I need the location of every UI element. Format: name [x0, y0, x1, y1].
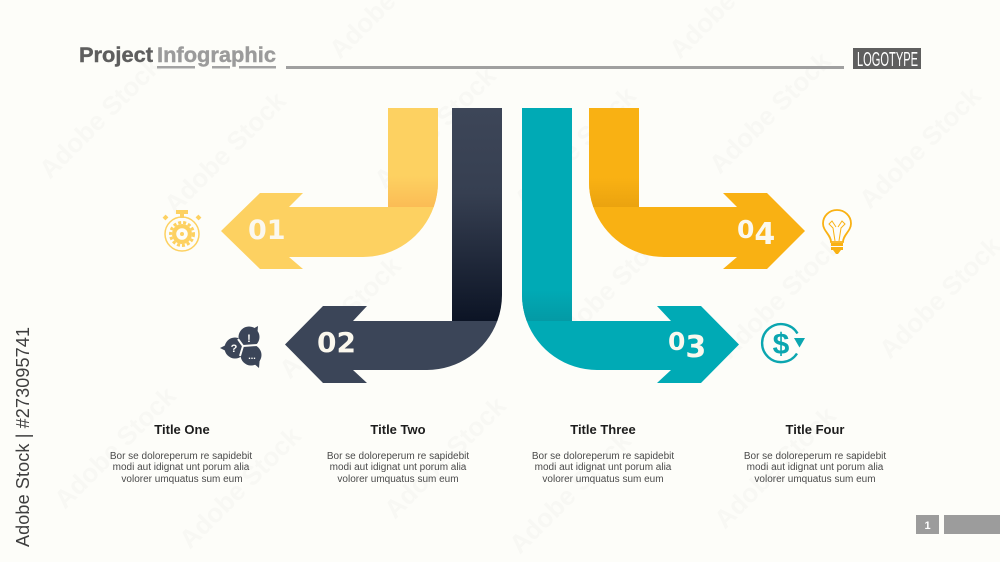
background watermark: Adobe Stock [368, 60, 502, 194]
icon: speech bubbles: ! [247, 333, 251, 345]
arrow 02: 02 [317, 326, 356, 359]
logotype [853, 48, 921, 71]
text block: title two: volorer umquatus sum eum [337, 474, 459, 485]
background watermark: Adobe Stock [33, 50, 167, 184]
background watermark: Adobe Stock [853, 80, 987, 214]
arrow 02 [285, 108, 502, 383]
text block: title two [327, 422, 469, 485]
background watermark: Adobe Stock [703, 45, 837, 179]
icon: speech bubbles [220, 326, 262, 368]
page number: 1 [924, 520, 931, 532]
icon: dollar cycle [762, 324, 805, 362]
background watermark: Adobe Stock [48, 380, 182, 514]
text block: title two: Bor se doloreperum re sapidebit [327, 451, 469, 462]
arrow 03: 3 [685, 330, 706, 365]
text block: title three: Title Three [570, 422, 636, 437]
text block: title three: modi aut idignat unt porum alia [535, 462, 672, 473]
text block: title three [532, 422, 674, 485]
text block: title three: Bor se doloreperum re sapidebit [532, 451, 674, 462]
arrow 01: 01 [248, 215, 286, 246]
background watermark: Adobe Stock [503, 425, 637, 559]
title: Project [79, 44, 153, 67]
footer bar [944, 515, 1000, 534]
text block: title two: Title Two [370, 422, 426, 437]
arrow 01 [221, 108, 438, 269]
header rule [286, 66, 844, 69]
background watermark: Adobe Stock [378, 390, 512, 524]
text block: title four: Bor se doloreperum re sapidebit [744, 451, 886, 462]
text block: title one [110, 422, 252, 485]
text block: title two: modi aut idignat unt porum alia [330, 462, 467, 473]
logotype: LOGOTYPE [857, 49, 918, 71]
text block: title three: volorer umquatus sum eum [542, 474, 664, 485]
arrow 03: 0 [668, 327, 685, 356]
arrow 04: 4 [754, 217, 775, 252]
arrow 04: 0 [737, 215, 754, 244]
icon: speech bubbles: ... [248, 351, 256, 361]
stock credit: Adobe Stock | #273095741 [13, 327, 33, 547]
icon: dollar cycle: $ [773, 328, 790, 361]
text block: title four: volorer umquatus sum eum [754, 474, 876, 485]
title [79, 44, 276, 68]
icon: speech bubbles: ? [231, 343, 238, 355]
arrow 03 [522, 108, 739, 383]
text block: title one: Title One [154, 422, 210, 437]
text block: title four [744, 422, 886, 485]
background watermark: Adobe Stock [508, 80, 642, 214]
text block: title one: modi aut idignat unt porum alia [113, 462, 250, 473]
background watermark: Adobe Stock [158, 85, 292, 219]
background watermark: Adobe Stock [543, 220, 677, 354]
page number [916, 515, 939, 534]
background watermark: Adobe Stock [173, 420, 307, 554]
text block: title one: volorer umquatus sum eum [121, 474, 243, 485]
icon: stopwatch gear [164, 210, 200, 251]
background watermark: Adobe Stock [708, 400, 842, 534]
icon: light bulb [823, 210, 851, 254]
title: Infographic [157, 44, 276, 67]
text block: title one: Bor se doloreperum re sapidebit [110, 451, 252, 462]
background watermark: Adobe Stock [713, 230, 847, 364]
arrow 04 [589, 108, 805, 269]
text block: title four: Title Four [786, 422, 844, 437]
background watermark: Adobe Stock [273, 250, 407, 384]
text block: title four: modi aut idignat unt porum alia [747, 462, 884, 473]
